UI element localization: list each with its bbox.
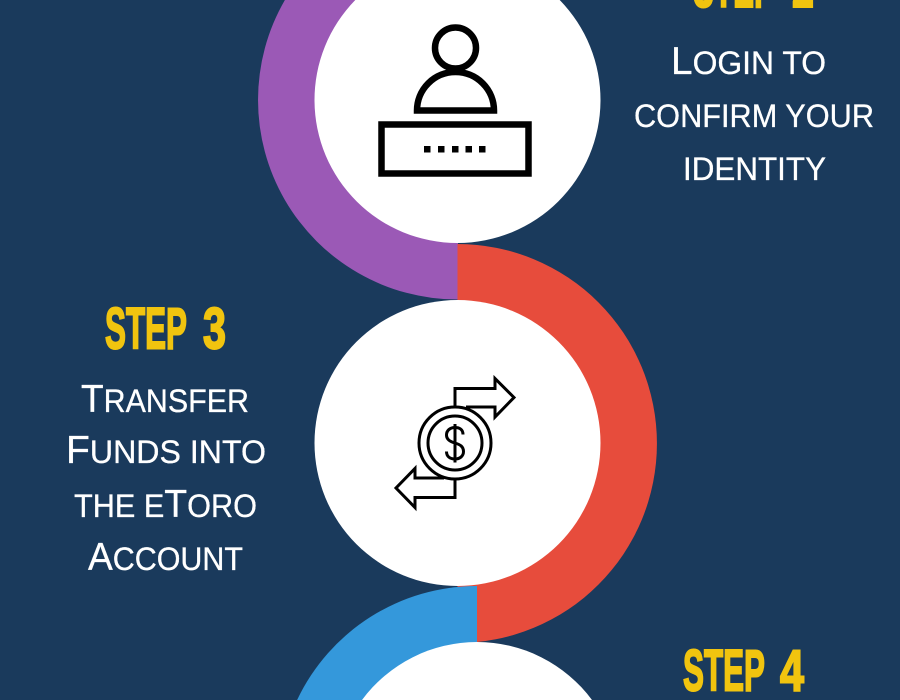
step 3 heading: 3 xyxy=(203,296,226,362)
step 2 ring: purple arc xyxy=(258,0,458,300)
step 3 description xyxy=(66,378,266,579)
step 2 description: IDENTITY xyxy=(683,151,826,187)
step 3 description: ACCOUNT xyxy=(88,536,243,579)
icon: user login with password box xyxy=(382,28,528,174)
step 2 description xyxy=(634,40,874,187)
step 3 ring: red arc xyxy=(458,244,657,643)
step 3 description: FUNDS INTO xyxy=(66,429,266,472)
icon: dollar coin with transfer arrows xyxy=(396,378,514,508)
step 3 heading: STEP xyxy=(105,296,187,362)
step 2 description: LOGIN TO xyxy=(671,40,826,83)
step 4 ring: blue arc xyxy=(297,586,477,700)
step 4 white circle xyxy=(362,642,592,700)
step 3 white circle xyxy=(314,300,600,586)
step 2 white circle xyxy=(314,0,600,243)
step 3 description: TRANSFER xyxy=(81,378,249,421)
step 3 description: THE ETORO xyxy=(74,483,257,526)
step 2 description: CONFIRM YOUR xyxy=(634,98,874,134)
